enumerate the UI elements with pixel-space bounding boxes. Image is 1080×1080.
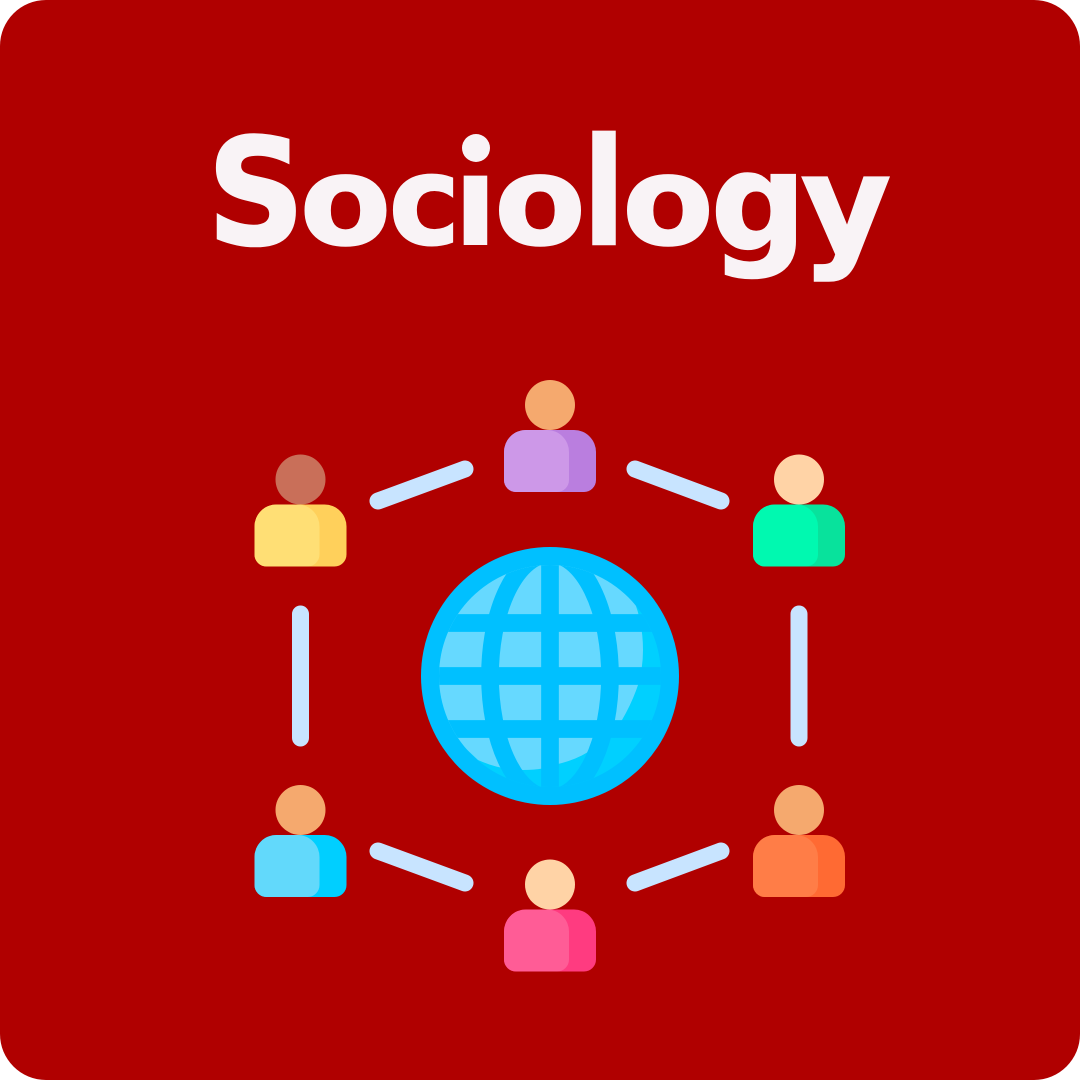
title: c [389, 130, 460, 273]
icon: person bottom-left [254, 785, 346, 897]
connector: top-left to top [378, 469, 465, 501]
title: g [711, 124, 806, 281]
icon: person bottom [504, 860, 596, 972]
title: o [622, 131, 714, 274]
icon: person top-left [254, 454, 346, 566]
title: S [207, 108, 305, 279]
title: y [801, 127, 891, 284]
title: l [583, 108, 625, 280]
icon: person top-right [753, 454, 845, 566]
icon: person top [504, 380, 596, 492]
connector: top to top-right [635, 469, 721, 501]
icon: person bottom-right [753, 785, 845, 897]
connector: bottom to bottom-right [635, 851, 721, 883]
title: o [494, 131, 586, 274]
title: i [454, 131, 497, 274]
connector: right vertical [790, 614, 808, 738]
title [216, 130, 890, 282]
icon: globe [420, 540, 680, 810]
connector: left vertical [292, 614, 309, 738]
title: o [300, 131, 391, 274]
connector: bottom-left to bottom [378, 851, 465, 883]
